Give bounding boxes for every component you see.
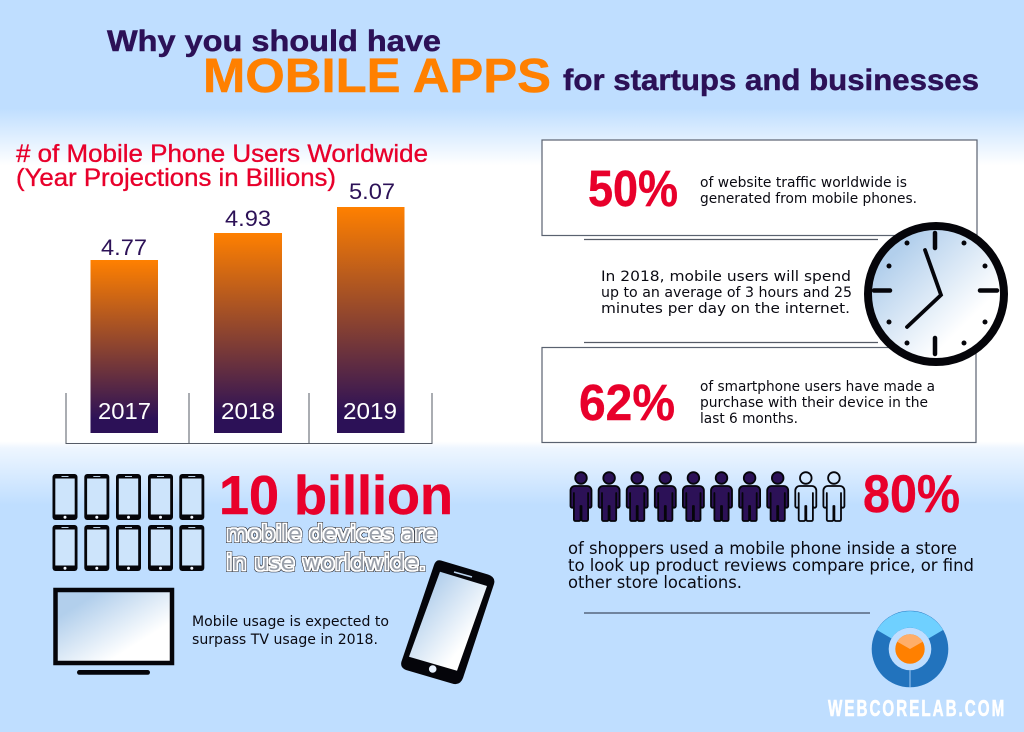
text: shoppers <box>568 539 974 592</box>
icon: television <box>56 590 172 675</box>
panel: 62% purchases: purchase with their device in the <box>700 395 928 411</box>
title: MOBILE APPS <box>203 50 551 103</box>
bar: 2017: 4.77 <box>101 235 147 260</box>
bar: 2018 <box>214 206 282 433</box>
outlined caption: mobile devices in use <box>226 522 437 576</box>
logo: webcorelab <box>828 611 1004 722</box>
stat: 10 billion: 10 billion <box>219 464 453 526</box>
outlined caption: mobile devices in use: mobile devices are <box>226 522 437 547</box>
chart heading: # of Mobile Phone Users Worldwide <box>16 140 428 168</box>
panel: 50% website traffic: of website traffic worldwide is <box>700 175 907 191</box>
chart heading <box>16 140 428 192</box>
bar: 2019: 5.07 <box>349 179 395 204</box>
bar: 2017 <box>90 235 158 433</box>
icon: clock <box>868 226 1004 362</box>
icon: ten people, eight filled <box>570 472 844 521</box>
outlined caption: mobile devices in use: in use worldwide. <box>226 551 426 576</box>
chart heading: (Year Projections in Billions) <box>16 164 336 192</box>
chart axis bracket <box>66 393 432 444</box>
panel: 50% website traffic <box>542 140 977 236</box>
text: shoppers: of shoppers used a mobile phone inside a store <box>568 539 957 558</box>
panel: 62% purchases: last 6 months. <box>700 411 798 427</box>
divider line <box>584 612 870 614</box>
panel: 50% website traffic: 50% <box>588 160 678 217</box>
panel: time spent on the internet: up to an average of 3 hours and 25 <box>601 285 852 301</box>
title: Why you should have <box>107 25 441 58</box>
panel: 62% purchases: of smartphone users have made a <box>700 379 935 395</box>
bar chart <box>66 179 432 444</box>
panel: 50% website traffic: generated from mobile phones. <box>700 191 917 207</box>
text: shoppers: to look up product reviews compare price, or find <box>568 556 974 575</box>
bar: 2018: 2018 <box>221 398 275 424</box>
title <box>107 25 979 103</box>
title: for startups and businesses <box>563 64 979 97</box>
text: mobile usage vs TV: surpass TV usage in 2018. <box>192 632 378 648</box>
bar: 2019: 2019 <box>343 398 397 424</box>
bar: 2018: 4.93 <box>225 206 271 231</box>
text: mobile usage vs TV <box>192 614 389 648</box>
bar: 2019 <box>337 179 404 433</box>
panel: time spent on the internet <box>584 240 878 342</box>
stat: 80%: 80% <box>863 465 960 524</box>
panel: 62% purchases: 62% <box>579 374 675 431</box>
text: mobile usage vs TV: Mobile usage is expected to <box>192 614 389 630</box>
panel: time spent on the internet: minutes per day on the internet. <box>601 301 850 317</box>
panel: 62% purchases <box>542 348 976 442</box>
text: shoppers: other store locations. <box>568 573 742 592</box>
icon: grid of ten phones <box>52 474 204 571</box>
bar: 2017: 2017 <box>98 398 151 424</box>
panel: time spent on the internet: In 2018, mobile users will spend <box>601 269 851 285</box>
icon: tilted smartphone <box>401 560 494 684</box>
logo: webcorelab: WEBCORELAB.COM <box>828 696 1004 722</box>
